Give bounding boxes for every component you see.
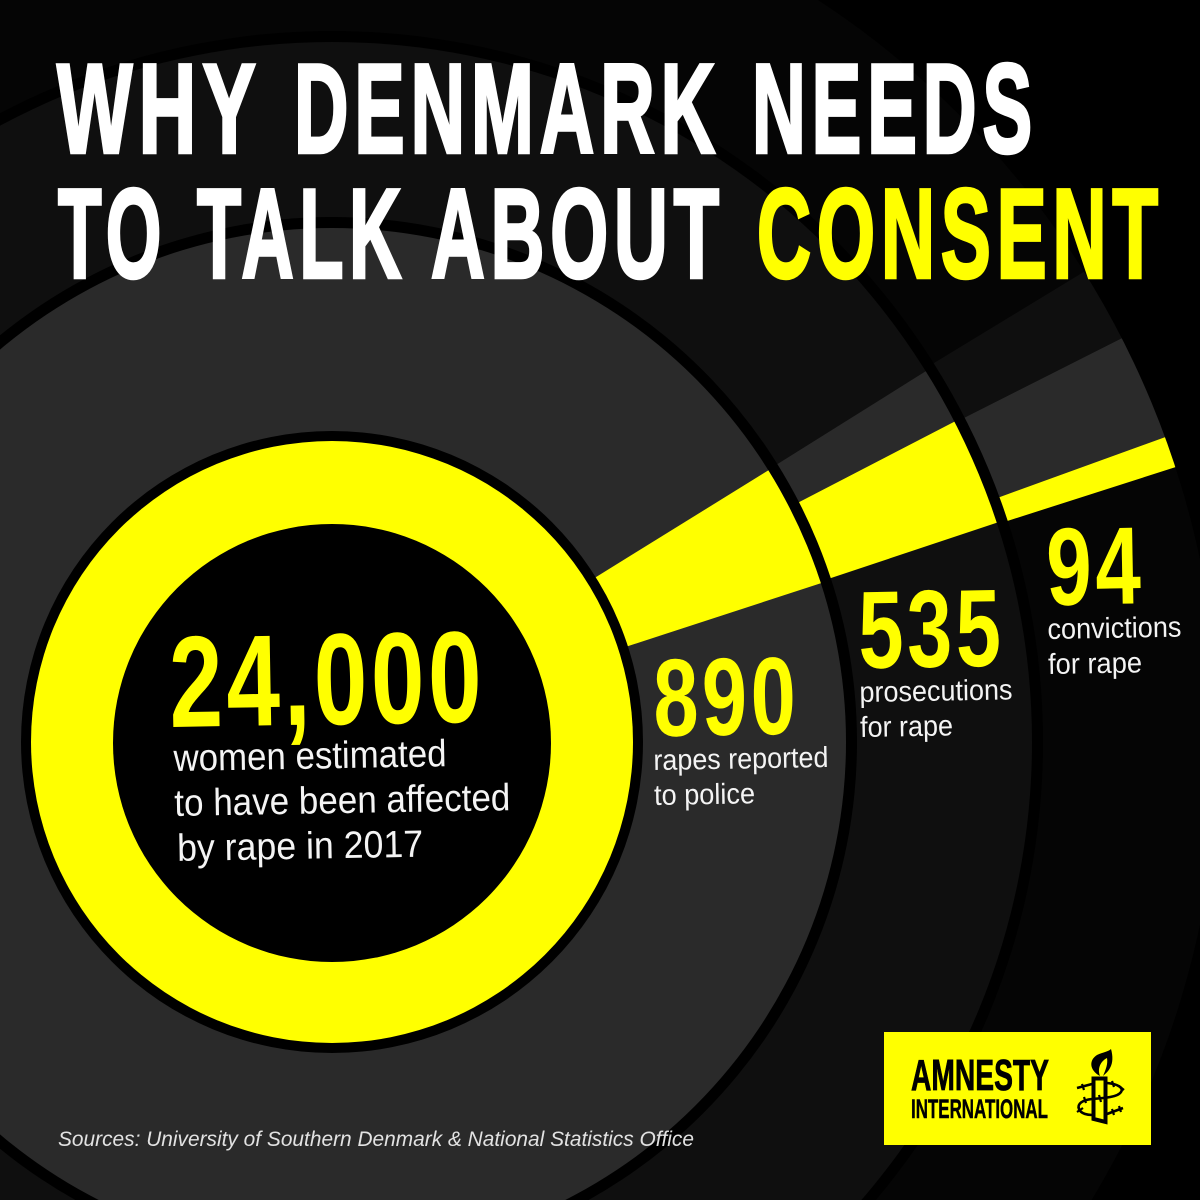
inner ring: reported rapes: [0, 217, 857, 1200]
icon: candle in barbed wire: [1077, 1049, 1124, 1122]
central yellow ring: [21, 431, 643, 1053]
outer ring: convictions: [934, 272, 1176, 521]
title: [57, 37, 1164, 304]
stat: 94 convictions: 94: [1045, 504, 1145, 629]
logo wordmark: INTERNATIONAL: [911, 1094, 1048, 1124]
logo wordmark: AMNESTY: [911, 1051, 1049, 1100]
title: ABOUT: [431, 162, 725, 304]
logo wordmark: [911, 1051, 1049, 1124]
stat: 890 rapes reported: 890: [652, 634, 800, 760]
stat: 24,000 women: 24,000: [168, 604, 486, 755]
stat: 535 prosecutions: for rape: [860, 710, 953, 744]
stat: 94 convictions: [1045, 504, 1182, 681]
stat: 535 prosecutions: prosecutions: [859, 674, 1013, 709]
title: TALK: [197, 162, 407, 304]
stat: 24,000 women: by rape in 2017: [177, 824, 423, 870]
title: WHY: [57, 37, 262, 179]
stat: 535 prosecutions: 535: [857, 566, 1005, 692]
title: DENMARK: [294, 37, 721, 179]
stat: 535 prosecutions: [857, 566, 1013, 744]
stat: 890 rapes reported: to police: [654, 778, 755, 812]
stat: 890 rapes reported: rapes reported: [653, 742, 829, 777]
stat: 24,000 women: to have been affected: [174, 777, 511, 825]
stat: 94 convictions: convictions: [1047, 612, 1182, 646]
title: TO: [58, 162, 167, 304]
logo: Amnesty International: [884, 1032, 1151, 1145]
stat: 24,000 women: [168, 603, 511, 870]
sources: Sources: University of Southern Denmark & National Statistics Office: [58, 1127, 694, 1151]
stat: 890 rapes reported: [651, 634, 829, 812]
stat: 24,000 women: women estimated: [172, 733, 447, 780]
stat: 94 convictions: for rape: [1048, 647, 1142, 681]
